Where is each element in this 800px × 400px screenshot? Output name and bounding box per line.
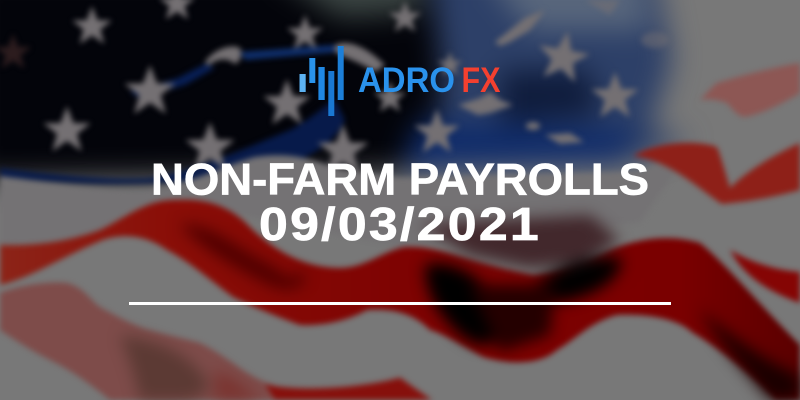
flag canton: [0, 0, 690, 180]
stars: [0, 0, 669, 173]
plum shading above stripe: [420, 215, 620, 268]
logo: AdroFX: [300, 46, 501, 116]
title: NON-FARM PAYROLLS: [151, 156, 649, 204]
main red stripe: [0, 200, 800, 400]
dark stripe shadow: [180, 215, 800, 400]
logo: AdroFX: FX: [462, 60, 501, 100]
right side stripes: [730, 250, 800, 303]
lower left pale stripe: [0, 282, 430, 400]
grey stripe under canton: [0, 150, 690, 247]
divider line: [129, 302, 671, 305]
blue fold bands: [0, 100, 345, 184]
icon: bar chart mark: [300, 46, 344, 116]
logo wordmark: ADRO: [358, 60, 455, 100]
date: 09/03/2021: [259, 198, 541, 250]
